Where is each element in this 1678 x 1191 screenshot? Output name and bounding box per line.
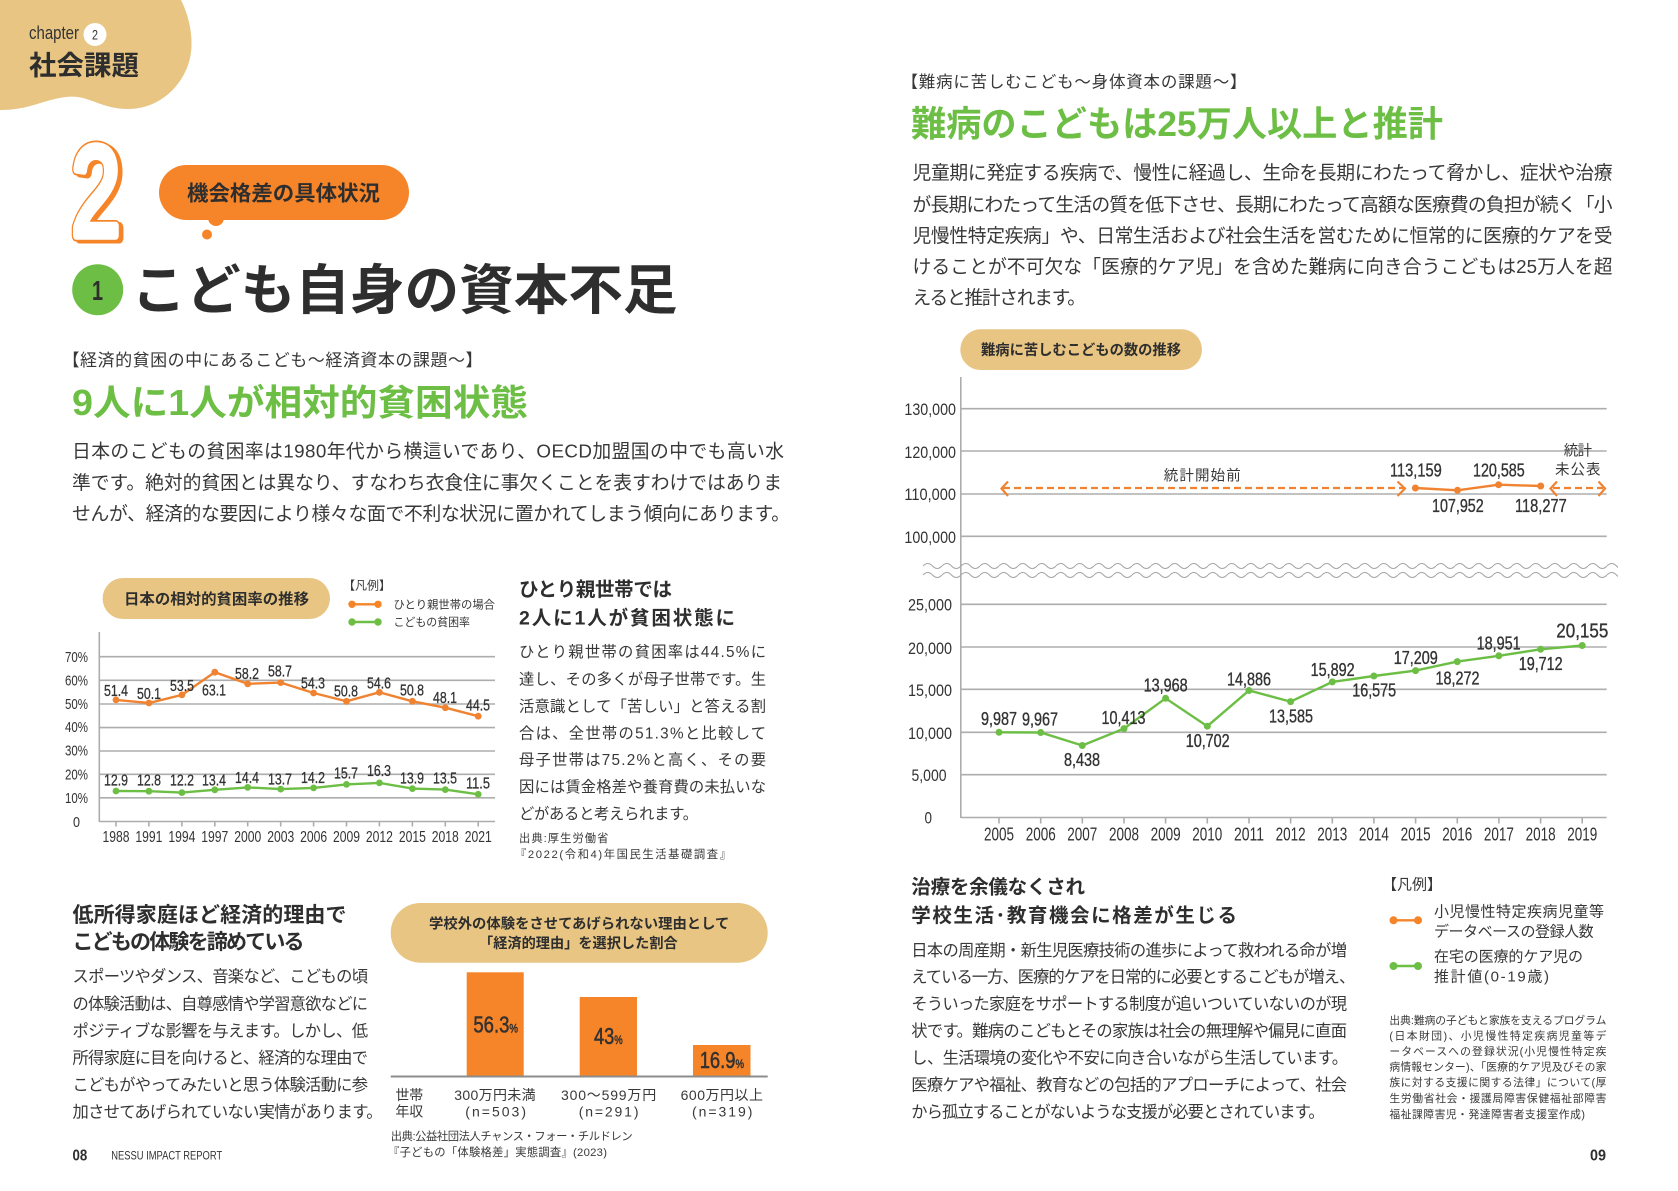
arrow: not yet published bbox=[1550, 482, 1605, 496]
upper y axis labels: 130,000 bbox=[904, 400, 956, 419]
y axis labels: 30% bbox=[65, 742, 88, 760]
bar: 3M-5.99M yen: 43% bbox=[594, 1023, 623, 1049]
green series: child poverty rate: 16.3 bbox=[367, 763, 391, 780]
x axis year labels: 2008 bbox=[1109, 824, 1139, 844]
lower y axis labels: 25,000 bbox=[908, 596, 952, 614]
intro paragraph: せんが、経済的な要因により様々な面で不利な状況に置かれてしまう傾向にあります。 bbox=[72, 503, 790, 524]
x axis year labels: 2015 bbox=[399, 829, 426, 846]
green headline: 250,000 children: 難病のこどもは25万人以上と推計 bbox=[911, 104, 1443, 144]
chart title pill: 日本の相対的貧困率の推移 bbox=[124, 590, 309, 608]
orange series: single parent households: 54.3 bbox=[301, 676, 325, 692]
bar category labels: (n=291) bbox=[579, 1103, 638, 1119]
green series: medical care children: 18,951 bbox=[1477, 633, 1521, 653]
paragraph: そういった家庭をサポートする制度が追いついていないのが現 bbox=[911, 995, 1347, 1013]
source bbox=[515, 831, 731, 861]
text block: single parent households bbox=[515, 579, 766, 861]
green series: medical care children: 13,968 bbox=[1144, 675, 1188, 695]
intro paragraph: 日本のこどもの貧困率は1980年代から横這いであり、OECD加盟国の中でも高い水 bbox=[72, 440, 784, 462]
footer left: 08 bbox=[72, 1148, 88, 1164]
chapter title: 社会課題 bbox=[29, 51, 139, 81]
green series: medical care children: 15,892 bbox=[1311, 660, 1355, 680]
x axis year labels: 2018 bbox=[432, 829, 459, 846]
chart title pill bbox=[391, 903, 768, 963]
x axis year labels: 2021 bbox=[465, 829, 492, 846]
source: right page: 族に対する支援に関する法律」について(厚 bbox=[1389, 1075, 1607, 1089]
paragraph: 活意識として「苦しい」と答える割 bbox=[519, 698, 766, 716]
x axis year labels: 2010 bbox=[1192, 824, 1222, 844]
green series: child poverty rate: 12.9 bbox=[104, 772, 128, 790]
legend item: registered children: データベースの登録人数 bbox=[1434, 922, 1594, 940]
paragraph: 母子世帯は75.2%と高く、その要 bbox=[519, 752, 766, 769]
source: 出典:公益社団法人チャンス・フォー・チルドレン bbox=[391, 1129, 633, 1143]
lower y axis labels bbox=[908, 596, 952, 828]
right intro paragraph: えると推計されます。 bbox=[912, 287, 1086, 308]
green headline: 1 in 9: 9人に1人が相対的貧困状態 bbox=[72, 382, 528, 423]
y axis labels: 70% bbox=[65, 649, 88, 666]
paragraph: こどもがやってみたいと思う体験活動に参 bbox=[72, 1076, 368, 1094]
paragraph: 合は、全世帯の51.3%と比較して bbox=[519, 726, 766, 742]
orange series: single parent households: 53.5 bbox=[170, 678, 194, 695]
grid and axes bbox=[961, 377, 1607, 824]
x axis year labels: 2018 bbox=[1526, 824, 1556, 844]
legend: right chart: 【凡例】 bbox=[1382, 876, 1442, 893]
section bubble: 機会格差の具体状況 bbox=[187, 182, 380, 206]
source: right page: 病情報センター)、「医療的ケア児及びその家 bbox=[1389, 1060, 1607, 1074]
green series: medical care children: 16,575 bbox=[1352, 681, 1396, 701]
x axis year labels bbox=[102, 829, 492, 846]
upper y axis labels: 110,000 bbox=[904, 485, 956, 504]
orange series: registered children: 120,585 bbox=[1473, 460, 1525, 480]
paragraph: ひとり親世帯の貧困率は44.5%に bbox=[519, 644, 766, 661]
intro paragraph bbox=[72, 440, 790, 524]
arrow: before statistics began bbox=[1002, 482, 1405, 496]
right intro paragraph: けることが不可欠な「医療的ケア児」を含めた難病に向き合うこどもは25万人を超 bbox=[912, 256, 1613, 277]
y axis labels: 50% bbox=[65, 696, 88, 713]
heading bbox=[72, 904, 346, 954]
x axis year labels: 2009 bbox=[333, 829, 360, 846]
green series: medical care children: 9,987 bbox=[981, 709, 1017, 729]
green series: child poverty rate: 13.5 bbox=[433, 770, 457, 788]
grid and axes bbox=[99, 632, 495, 826]
paragraph: の体験活動は、自尊感情や学習意欲などに bbox=[72, 995, 368, 1013]
chapter label: chapter bbox=[29, 23, 79, 43]
paragraph: 医療ケアや福祉、教育などの包括的アプローチによって、社会 bbox=[911, 1076, 1347, 1094]
paragraph: 加させてあげられていない実情があります。 bbox=[72, 1103, 382, 1121]
legend item: registered children bbox=[1390, 902, 1604, 940]
x axis year labels: 2019 bbox=[1567, 824, 1597, 844]
x axis year labels: 2017 bbox=[1484, 824, 1514, 844]
main heading bbox=[72, 261, 677, 321]
legend item: medical care children: 推計値(0-19歳) bbox=[1434, 968, 1549, 986]
green series: child poverty rate bbox=[104, 763, 490, 798]
bar category labels: (n=503) bbox=[465, 1103, 526, 1119]
orange series: registered children: 107,952 bbox=[1432, 496, 1484, 516]
paragraph: えている一方、医療的ケアを日常的に必要とするこどもが増え、 bbox=[911, 968, 1355, 986]
legend item: medical care children: 在宅の医療的ケア児の bbox=[1434, 948, 1583, 966]
bar category labels: 世帯 bbox=[395, 1087, 423, 1103]
panel: poverty rate line chart bbox=[65, 578, 495, 846]
big section numeral 2: 2 bbox=[72, 121, 120, 263]
bar: 3M-5.99M yen bbox=[580, 997, 637, 1076]
heading: 治療を余儀なくされ bbox=[911, 876, 1085, 898]
legend: こどもの貧困率 bbox=[394, 616, 470, 629]
chapter tab bbox=[0, 0, 192, 110]
legend: ひとり親世帯の場合 bbox=[394, 598, 495, 612]
paragraph: から孤立することがないような支援が必要とされています。 bbox=[911, 1103, 1325, 1121]
paragraph: どがあると考えられます。 bbox=[519, 806, 698, 823]
upper y axis labels bbox=[904, 400, 956, 547]
orange series: single parent households: 63.1 bbox=[202, 682, 226, 700]
bar category labels: 300〜599万円 bbox=[561, 1087, 656, 1103]
bar category labels: (n=319) bbox=[692, 1103, 752, 1119]
green series: medical care children: 19,712 bbox=[1519, 654, 1563, 674]
green series: child poverty rate: 15.7 bbox=[334, 766, 358, 782]
heading: 低所得家庭ほど経済的理由で bbox=[72, 904, 346, 927]
bar: under 3M yen bbox=[467, 972, 524, 1076]
green series: child poverty rate: 13.4 bbox=[202, 772, 226, 790]
source: right page: (日本財団)、小児慢性特定疾病児童等デ bbox=[1389, 1029, 1607, 1043]
x axis year labels: 1994 bbox=[168, 829, 196, 846]
footer left bbox=[72, 1148, 223, 1164]
green series: child poverty rate: 13.7 bbox=[268, 772, 292, 788]
y axis labels: 10% bbox=[65, 790, 88, 807]
green series: medical care children: 20,155 bbox=[1556, 620, 1608, 642]
text block: low income families bbox=[72, 904, 382, 1121]
chart title pill: 学校外の体験をさせてあげられない理由として bbox=[429, 914, 729, 932]
paragraph: 因には賃金格差や養育費の未払いな bbox=[519, 779, 766, 796]
green series: child poverty rate: 11.5 bbox=[466, 776, 490, 792]
green series: medical care children: 13,585 bbox=[1269, 706, 1313, 726]
lower y axis labels: 15,000 bbox=[908, 682, 952, 700]
x axis year labels: 1988 bbox=[102, 829, 130, 846]
green series: medical care children bbox=[981, 620, 1608, 770]
paragraph: 所得家庭に目を向けると、経済的な理由で bbox=[72, 1049, 368, 1067]
green series: medical care children: 10,702 bbox=[1186, 731, 1230, 751]
x axis year labels: 2000 bbox=[234, 829, 261, 846]
label: not yet published: 統計 bbox=[1564, 442, 1592, 460]
upper y axis labels: 120,000 bbox=[904, 443, 956, 462]
x axis year labels: 2014 bbox=[1359, 824, 1389, 844]
paragraph bbox=[519, 644, 766, 823]
source: right page: 出典:難病の子どもと家族を支えるプログラム bbox=[1389, 1013, 1607, 1027]
x axis year labels: 2016 bbox=[1442, 824, 1472, 844]
chart title pill: 「経済的理由」を選択した割合 bbox=[479, 934, 678, 952]
orange series: single parent households: 58.7 bbox=[268, 664, 292, 680]
intro paragraph: 準です。絶対的貧困とは異なり、すなわち衣食住に事欠くことを表すわけではありま bbox=[72, 472, 782, 493]
source bbox=[388, 1129, 633, 1159]
y axis labels: 20% bbox=[65, 766, 88, 784]
right intro paragraph bbox=[912, 162, 1613, 308]
label: not yet published bbox=[1555, 442, 1601, 478]
big section numeral 2: 2 bbox=[75, 123, 124, 265]
orange series: single parent households: 58.2 bbox=[235, 666, 259, 683]
source: right page: ータベースへの登録状況(小児慢性特定疾 bbox=[1389, 1044, 1607, 1058]
chart title pill: 難病に苦しむこどもの数の推移 bbox=[981, 341, 1181, 359]
y axis labels: 60% bbox=[65, 672, 88, 690]
source: right page bbox=[1389, 1013, 1607, 1121]
right intro paragraph: 児童期に発症する疾病で、慢性に経過し、生命を長期にわたって脅かし、症状や治療 bbox=[912, 162, 1613, 183]
x axis year labels: 1997 bbox=[201, 829, 228, 846]
x axis year labels: 2009 bbox=[1151, 824, 1181, 844]
heading: こどもの体験を諦めている bbox=[72, 931, 304, 954]
legend: 【凡例】 bbox=[343, 578, 391, 592]
x axis year labels: 2013 bbox=[1317, 824, 1347, 844]
chapter number badge bbox=[84, 23, 106, 46]
heading text: こども自身の資本不足 bbox=[132, 261, 678, 321]
bar category labels bbox=[395, 1087, 763, 1119]
x axis year labels bbox=[984, 824, 1597, 844]
green series: medical care children: 14,886 bbox=[1227, 669, 1271, 689]
heading bbox=[519, 579, 735, 629]
x axis year labels: 2006 bbox=[300, 829, 327, 846]
heading bbox=[911, 876, 1237, 927]
green series: child poverty rate: 14.4 bbox=[235, 770, 259, 787]
lower y axis labels: 0 bbox=[924, 810, 932, 828]
upper y axis labels: 100,000 bbox=[904, 528, 956, 547]
x axis year labels: 2003 bbox=[267, 829, 294, 846]
green series: child poverty rate: 12.2 bbox=[170, 772, 194, 790]
green series: child poverty rate: 12.8 bbox=[137, 772, 161, 790]
subheading: economic capital: 【経済的貧困の中にあるこども〜経済資本の課題〜】 bbox=[62, 351, 482, 370]
orange series: single parent households: 50.1 bbox=[137, 686, 161, 703]
orange series: single parent households: 51.4 bbox=[104, 683, 128, 700]
orange series: single parent households: 54.6 bbox=[367, 676, 391, 692]
section bubble bbox=[159, 165, 409, 240]
legend bbox=[343, 578, 495, 629]
orange series: registered children bbox=[1390, 460, 1567, 516]
orange series: registered children: 113,159 bbox=[1390, 460, 1442, 480]
x axis year labels: 2012 bbox=[1276, 824, 1306, 844]
green series: medical care children: 9,967 bbox=[1022, 709, 1058, 729]
chapter number badge: 2 bbox=[92, 26, 98, 42]
green series: child poverty rate: 13.9 bbox=[400, 770, 424, 788]
chart title pill bbox=[103, 578, 330, 619]
label: not yet published: 未公表 bbox=[1555, 462, 1601, 478]
orange series: single parent households: 48.1 bbox=[433, 690, 457, 707]
subheading: physical capital: 【難病に苦しむこども〜身体資本の課題〜】 bbox=[902, 72, 1246, 92]
big section numeral 2: 2 bbox=[72, 121, 120, 263]
green series: child poverty rate: 14.2 bbox=[301, 770, 325, 787]
paragraph: 日本の周産期・新生児医療技術の進歩によって救われる命が増 bbox=[911, 942, 1347, 960]
right intro paragraph: 児慢性特定疾病」や、日常生活および社会生活を営むために恒常的に医療的ケアを受 bbox=[912, 225, 1612, 246]
green series: medical care children: 18,272 bbox=[1436, 669, 1480, 689]
legend item: medical care children bbox=[1390, 948, 1583, 986]
source: 出典:厚生労働省 bbox=[519, 831, 608, 845]
y axis labels bbox=[65, 649, 88, 831]
bar: 6M yen and over: 16.9% bbox=[700, 1047, 744, 1073]
chart title pill bbox=[960, 329, 1202, 370]
paragraph: スポーツやダンス、音楽など、こどもの頃 bbox=[72, 968, 368, 986]
legend: right chart bbox=[1382, 876, 1604, 986]
bar: 6M yen and over bbox=[693, 1045, 750, 1076]
bar category labels: 600万円以上 bbox=[681, 1087, 763, 1103]
x axis year labels: 2005 bbox=[984, 824, 1014, 844]
green series: medical care children: 8,438 bbox=[1064, 750, 1100, 770]
lower y axis labels: 10,000 bbox=[908, 725, 952, 743]
bar category labels: 年収 bbox=[395, 1103, 423, 1119]
paragraph bbox=[911, 942, 1355, 1121]
bar: under 3M yen: 56.3% bbox=[473, 1012, 518, 1038]
x axis year labels: 2012 bbox=[366, 829, 393, 846]
source: right page: 生労働省社会・援護局障害保健福祉部障害 bbox=[1389, 1091, 1607, 1105]
heading: ひとり親世帯では bbox=[519, 579, 672, 601]
lower y axis labels: 20,000 bbox=[908, 640, 952, 658]
orange series: registered children: 118,277 bbox=[1515, 496, 1567, 516]
green number circle: 1 bbox=[92, 275, 103, 306]
page number right: 09 bbox=[1590, 1148, 1606, 1164]
x axis year labels: 2011 bbox=[1234, 824, 1264, 844]
source: 『子どもの「体験格差」実態調査』(2023) bbox=[388, 1145, 607, 1159]
legend item: registered children: 小児慢性特定疾病児童等 bbox=[1434, 902, 1604, 920]
paragraph: 状です。難病のこどもとその家族は社会の無理解や偏見に直面 bbox=[911, 1022, 1347, 1040]
orange series: single parent households bbox=[104, 664, 490, 720]
x axis year labels: 2015 bbox=[1401, 824, 1431, 844]
green series: medical care children: 10,413 bbox=[1102, 708, 1146, 728]
x axis year labels: 2007 bbox=[1067, 824, 1097, 844]
y axis labels: 0 bbox=[73, 814, 80, 831]
paragraph bbox=[72, 968, 382, 1121]
panel: intractable disease line chart bbox=[904, 329, 1618, 844]
footer left: NESSU IMPACT REPORT bbox=[111, 1148, 223, 1162]
x axis year labels: 2006 bbox=[1026, 824, 1056, 844]
y axis labels: 40% bbox=[65, 719, 88, 736]
source: right page: 福祉課障害児・発達障害者支援室作成) bbox=[1389, 1107, 1585, 1121]
x axis year labels: 1991 bbox=[135, 829, 162, 846]
lower y axis labels: 5,000 bbox=[912, 767, 946, 785]
text block: medical care and education gap bbox=[911, 876, 1355, 1121]
chapter blob bbox=[0, 0, 192, 110]
label: before statistics began: 統計開始前 bbox=[1164, 468, 1241, 484]
panel: bar chart of economic reasons bbox=[388, 903, 768, 1159]
bar category labels: 300万円未満 bbox=[454, 1087, 536, 1103]
source: 『2022(令和4)年国民生活基礎調査』 bbox=[515, 847, 731, 861]
axis break wave bbox=[923, 558, 1618, 580]
orange series: single parent households: 50.8 bbox=[400, 682, 424, 700]
green series: medical care children: 17,209 bbox=[1394, 648, 1438, 668]
right intro paragraph: が長期にわたって生活の質を低下させ、長期にわたって高額な医療費の負担が続く「小 bbox=[912, 194, 1613, 215]
green number circle bbox=[72, 264, 123, 315]
orange series: single parent households: 44.5 bbox=[466, 698, 490, 714]
paragraph: 達し、その多くが母子世帯です。生 bbox=[519, 670, 766, 688]
paragraph: ポジティブな影響を与えます。しかし、低 bbox=[72, 1021, 368, 1040]
heading: 学校生活･教育機会に格差が生じる bbox=[911, 904, 1237, 927]
paragraph: し、生活環境の変化や不安に向き合いながら生活しています。 bbox=[911, 1049, 1348, 1067]
heading: 2人に1人が貧困状態に bbox=[519, 606, 735, 629]
orange series: single parent households: 50.8 bbox=[334, 684, 358, 700]
